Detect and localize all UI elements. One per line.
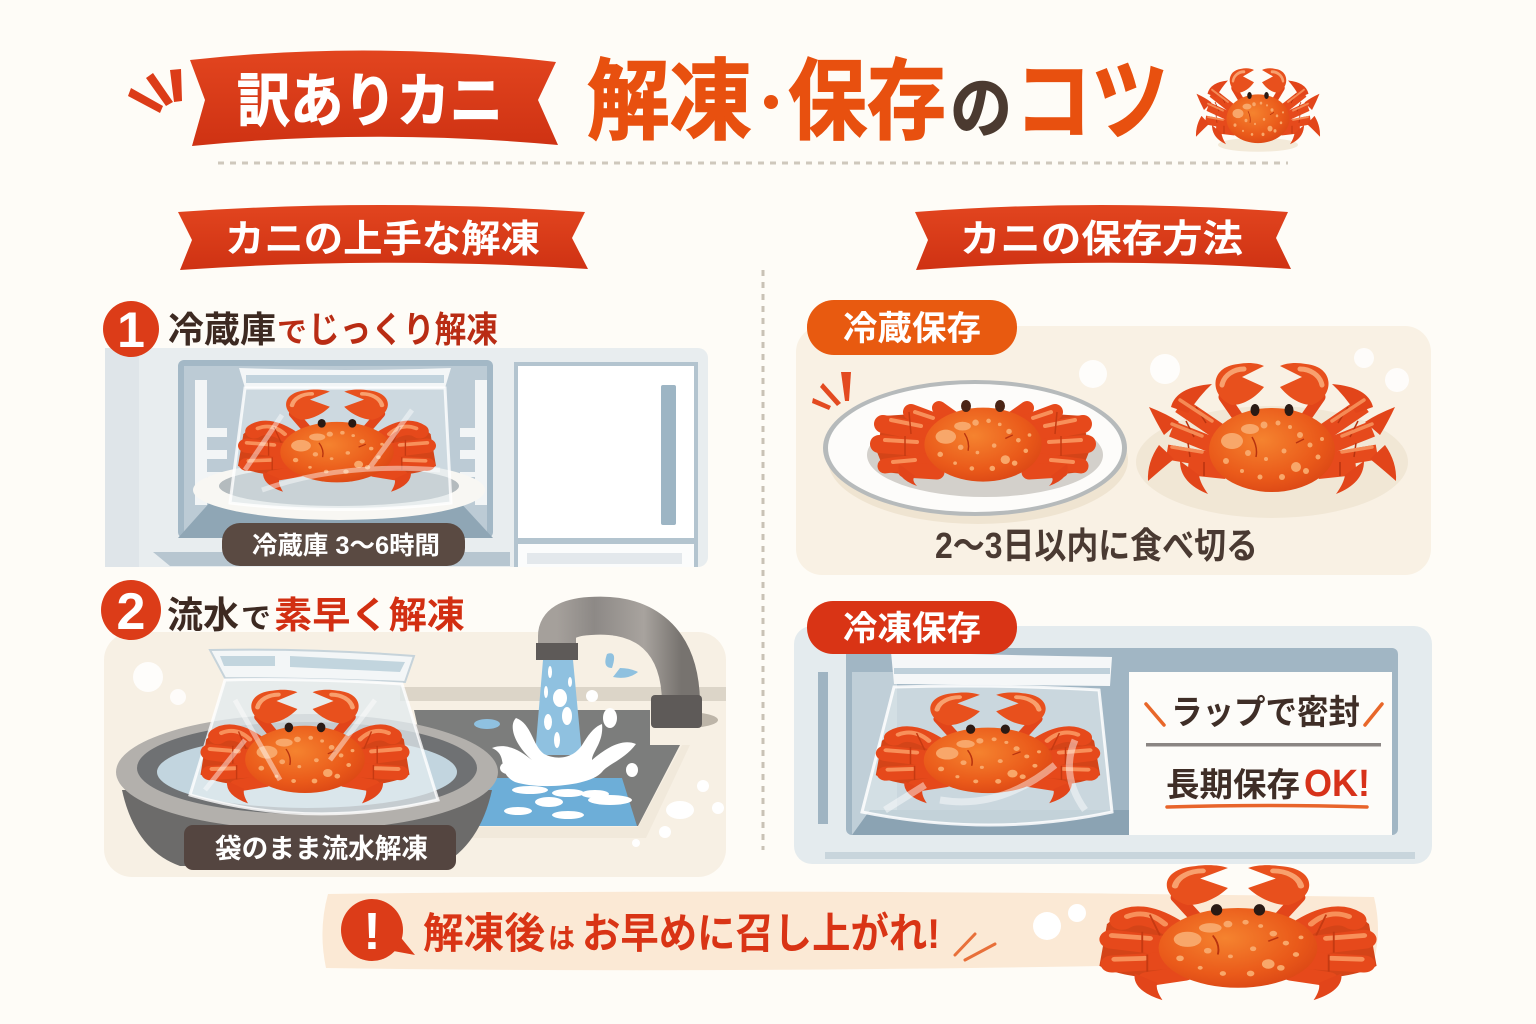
step 1 heading: じっくり解凍 xyxy=(308,309,498,350)
emphasis marks xyxy=(812,372,851,410)
tab: refrigerated xyxy=(807,300,1017,355)
plate xyxy=(193,460,485,520)
info card: OK! xyxy=(1304,763,1370,805)
section heading: thawing xyxy=(178,205,588,270)
icon: crab xyxy=(1099,865,1377,1000)
bag with crab xyxy=(230,368,451,510)
tab: frozen xyxy=(807,601,1017,654)
info card: 長期保存 xyxy=(1166,766,1300,803)
bottom callout banner: 解凍後 xyxy=(423,910,545,957)
section heading: storage xyxy=(915,205,1291,270)
title text: 保存 xyxy=(788,52,946,151)
fridge door xyxy=(514,362,698,567)
title text: コツ xyxy=(1015,52,1168,151)
step 2 heading: 素早く解凍 xyxy=(274,595,465,636)
bottom callout banner: は xyxy=(548,923,575,954)
panel: fridge thawing xyxy=(105,348,708,567)
step 1 heading: 1 xyxy=(117,302,145,358)
bag with crab xyxy=(862,652,1112,825)
step 1 heading: 冷蔵庫 xyxy=(168,309,276,350)
step 2 heading: 流水 xyxy=(167,595,239,636)
info card xyxy=(1129,672,1392,835)
bottom callout banner: お早めに召し上がれ! xyxy=(582,910,940,957)
tab: frozen: 冷凍保存 xyxy=(843,610,981,648)
faucet xyxy=(536,616,718,728)
bowl xyxy=(116,714,498,866)
fridge interior xyxy=(178,360,493,538)
sink xyxy=(400,687,726,838)
bag with crab xyxy=(190,650,438,814)
water stream and splash xyxy=(474,660,724,847)
section heading: storage: カニの保存方法 xyxy=(960,219,1243,261)
title text: の xyxy=(950,71,1012,147)
panel: refrigerated storage xyxy=(796,326,1431,575)
icon: title crab xyxy=(1196,68,1320,152)
bottom callout banner xyxy=(322,865,1378,1000)
label: 3-6 hours xyxy=(222,523,465,566)
step 2 heading: で xyxy=(241,603,271,635)
title text xyxy=(587,52,1168,151)
title text: 解凍 xyxy=(587,52,752,151)
icon: alert bubble xyxy=(341,899,415,961)
icon: alert bubble: ! xyxy=(363,903,381,961)
panel: running water thawing xyxy=(104,616,726,877)
section heading: thawing: カニの上手な解凍 xyxy=(225,219,540,261)
step 2 heading: 2 xyxy=(117,583,145,641)
label: keep in bag xyxy=(184,825,456,870)
step 1 heading: で xyxy=(277,317,307,349)
raw crab xyxy=(1079,348,1409,518)
title ribbon: 訳ありカニ xyxy=(237,69,503,134)
plate with crab xyxy=(823,380,1128,524)
note: eat within 2-3 days: 2〜3日以内に食べ切る xyxy=(935,525,1258,566)
emphasis marks: title xyxy=(128,69,182,113)
panel: frozen storage xyxy=(794,626,1432,864)
label: keep in bag: 袋のまま流水解凍 xyxy=(215,834,428,864)
step 1 heading xyxy=(103,301,498,358)
step 2 heading xyxy=(101,580,465,641)
label: 3-6 hours: 冷蔵庫 3〜6時間 xyxy=(252,532,440,560)
title ribbon xyxy=(190,50,558,146)
tab: refrigerated: 冷蔵保存 xyxy=(843,310,981,348)
info card: ラップで密封 xyxy=(1171,694,1360,732)
